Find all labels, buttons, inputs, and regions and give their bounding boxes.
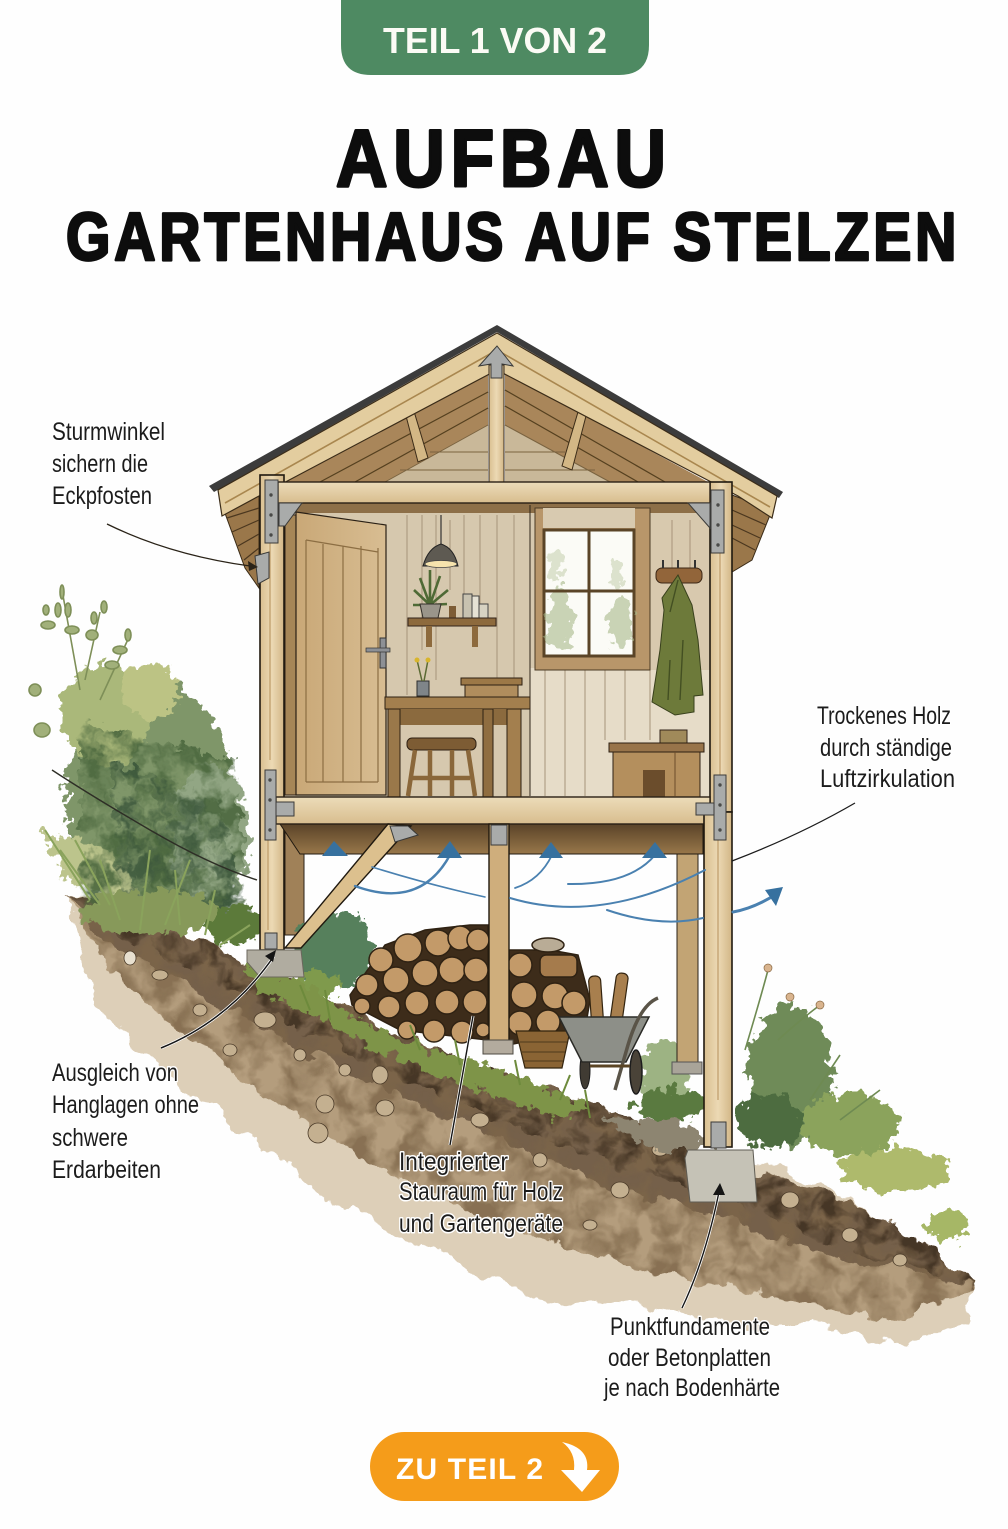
- callout: dry wood: Luftzirkulation: [820, 765, 955, 793]
- title: GARTENHAUS AUF STELZEN: [66, 199, 956, 275]
- desk with vase and box: [385, 658, 530, 797]
- callout: point foundations: Punktfundamente: [610, 1313, 770, 1341]
- window: [535, 508, 650, 670]
- callout: point foundations: oder Betonplatten: [608, 1344, 771, 1372]
- wooden structure: posts and beams: [260, 475, 732, 1147]
- callout: dry wood: durch ständige: [820, 734, 952, 762]
- basket: [516, 1031, 570, 1068]
- callout: slope compensation: Hanglagen ohne: [52, 1091, 199, 1119]
- badge: part 1 of 2: [341, 0, 649, 75]
- callout: integrated storage: Integrierter: [399, 1148, 508, 1176]
- callout: integrated storage: und Gartengeräte: [399, 1210, 563, 1238]
- back right post: [672, 850, 702, 1074]
- callout: dry wood: [732, 702, 955, 861]
- metal brackets: [255, 346, 726, 1148]
- airflow arrows: [322, 841, 783, 922]
- callout: dry wood: Trockenes Holz: [817, 702, 951, 730]
- callout: storm brackets: sichern die: [52, 450, 148, 478]
- firewood stack: [350, 925, 590, 1045]
- soil slope: [65, 890, 978, 1345]
- callout: slope compensation: Ausgleich von: [52, 1059, 178, 1087]
- stool: [407, 738, 476, 796]
- callout: slope compensation: Erdarbeiten: [52, 1156, 161, 1184]
- tool handles: [588, 972, 629, 1026]
- callout: storm brackets: Eckpfosten: [52, 482, 152, 510]
- badge: part 1 of 2: TEIL 1 VON 2: [383, 20, 607, 61]
- icon: curved arrow: [561, 1442, 600, 1492]
- guy wire on the left slope: [52, 770, 257, 880]
- concrete foundation left: [247, 950, 304, 977]
- callout: integrated storage: [399, 1016, 563, 1238]
- coat on hook rail: [652, 560, 703, 715]
- title: AUFBAU: [336, 114, 666, 204]
- callout: point foundations: je nach Bodenhärte: [603, 1374, 780, 1402]
- concrete foundation right: [685, 1150, 757, 1202]
- roof gable: [209, 325, 783, 588]
- button: to part 2: ZU TEIL 2: [396, 1453, 543, 1486]
- title: [66, 114, 956, 275]
- cabinet with basket: [609, 730, 704, 797]
- back left post: [285, 825, 304, 935]
- callout: integrated storage: Stauraum für Holz: [399, 1178, 563, 1206]
- wheelbarrow: [559, 998, 658, 1094]
- door: [285, 512, 390, 795]
- callout: storm brackets: [52, 418, 258, 571]
- ground grass strip: [245, 965, 720, 1150]
- left bush: [29, 585, 261, 945]
- interior wall: [283, 500, 710, 798]
- callout: point foundations: [603, 1183, 780, 1402]
- shrub behind brace: [290, 912, 375, 999]
- callout: storm brackets: Sturmwinkel: [52, 418, 165, 446]
- callout: slope compensation: [52, 950, 276, 1184]
- hanging lamp: [423, 515, 458, 568]
- right plants: [635, 964, 972, 1239]
- plant and shelf: [408, 570, 496, 647]
- callout: slope compensation: schwere: [52, 1124, 128, 1152]
- button: to part 2: [370, 1432, 619, 1501]
